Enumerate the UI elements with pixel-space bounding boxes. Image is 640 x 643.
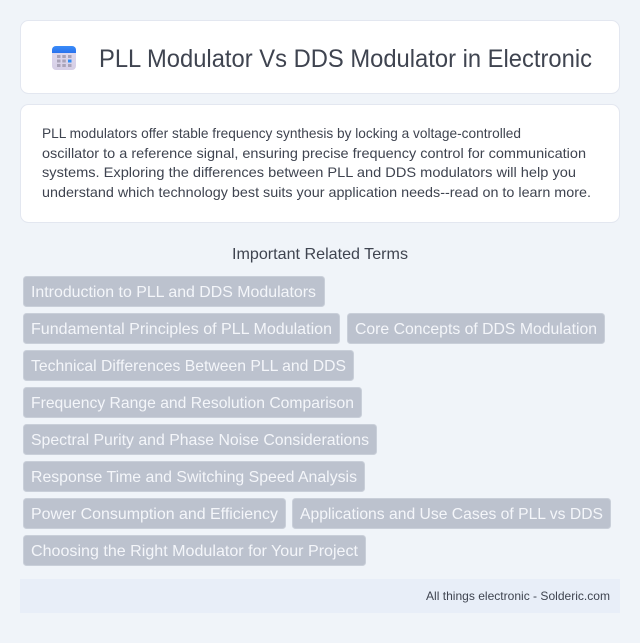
footer [20,579,620,613]
chip: power consumption: Power Consumption and Efficiency [31,506,278,523]
chip: introduction [24,276,324,306]
title: PLL Modulator Vs DDS Modulator in Electronic [99,45,592,73]
heading: related terms: Important Related Terms [232,246,408,263]
chip: technical differences [24,350,354,380]
chip: applications [292,498,610,528]
chip: choosing modulator: Choosing the Right Modulator for Your Project [31,543,359,560]
chip: choosing modulator [24,536,366,566]
chip: core concepts [348,314,604,344]
chip: technical differences: Technical Differences Between PLL and DDS [31,358,346,375]
chip: applications: Applications and Use Cases of PLL vs DDS [300,506,603,523]
chip: core concepts: Core Concepts of DDS Modulation [355,321,597,338]
chip: spectral purity [24,424,376,454]
chip: spectral purity: Spectral Purity and Phase Noise Considerations [31,432,369,449]
header card [20,20,620,94]
chip: power consumption [24,498,286,528]
intro text: PLL modulators offer stable frequency synthesis by locking a voltage-controlled [42,125,521,141]
chip: frequency range [24,388,362,418]
icon: calendar [52,46,76,70]
intro text: systems. Exploring the differences between PLL and DDS modulators will help you [42,164,576,180]
chip: frequency range: Frequency Range and Resolution Comparison [31,395,354,412]
footer: All things electronic - Solderic.com [426,589,610,603]
chip: response time: Response Time and Switching Speed Analysis [31,469,357,486]
intro text: understand which technology best suits your application needs--read on to learn more. [42,184,591,200]
panel: intro paragraph [20,104,620,222]
intro text: oscillator to a reference signal, ensuring precise frequency control for communication [42,145,586,161]
chip: fundamental principles: Fundamental Principles of PLL Modulation [31,321,332,338]
chip: response time [24,462,364,492]
chip: introduction: Introduction to PLL and DDS Modulators [31,284,316,301]
chip: fundamental principles [24,314,340,344]
intro text [42,125,591,200]
